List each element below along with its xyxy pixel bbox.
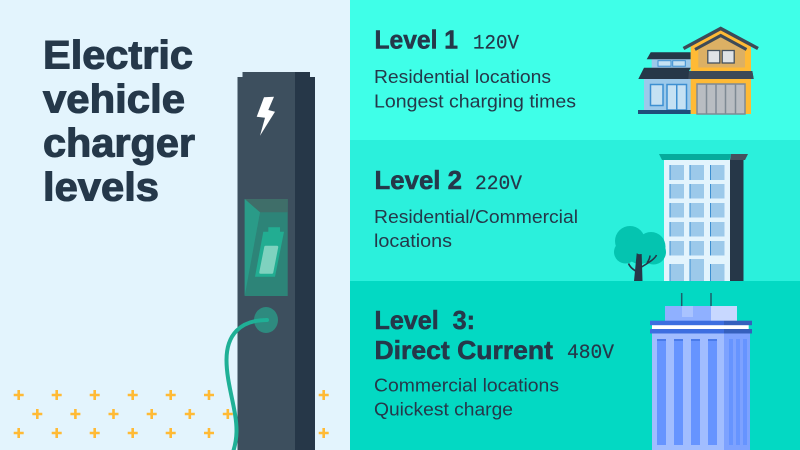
text block: level 2: Level 2	[374, 165, 462, 195]
title: Electric	[43, 34, 193, 78]
charging station	[226, 72, 315, 450]
text block: level 2	[374, 165, 578, 251]
text block: level 3: Level 3:	[374, 305, 475, 335]
icon: tree	[614, 226, 666, 281]
title: charger	[43, 122, 195, 166]
icon: lightning bolt	[257, 97, 275, 136]
charger socket	[254, 307, 278, 333]
text block: level 2: 220V	[475, 173, 522, 196]
text block: level 1: Longest charging times	[374, 90, 576, 112]
text block: level 1: Residential locations	[374, 66, 551, 87]
text block: level 2: Residential/Commercial	[374, 206, 578, 227]
panel: level 1 background	[350, 0, 800, 140]
text block: level 3: Direct Current	[374, 335, 553, 365]
title: vehicle	[43, 78, 185, 122]
panel: level 2 background	[350, 140, 800, 281]
icon: office tower	[650, 293, 752, 450]
decorative plus pattern	[14, 390, 329, 438]
charger screen	[245, 199, 288, 296]
icon: battery	[255, 227, 284, 277]
text block: level 3: Commercial locations	[374, 375, 559, 396]
charger body	[238, 72, 295, 450]
icon: house	[638, 28, 758, 114]
text block: level 3	[374, 305, 614, 420]
icon: apartment building	[659, 154, 748, 281]
text block: level 3: Quickest charge	[374, 399, 513, 420]
text block: level 2: locations	[374, 230, 452, 251]
charger side	[295, 72, 315, 450]
text block: level 3: 480V	[567, 342, 614, 365]
text block: level 1	[374, 24, 576, 112]
title: levels	[43, 166, 159, 210]
text block: level 1: 120V	[473, 32, 519, 56]
text block: level 1: Level 1	[374, 24, 458, 54]
panel: level 3 background	[350, 281, 800, 450]
charging cable	[226, 320, 267, 450]
title	[43, 34, 195, 210]
